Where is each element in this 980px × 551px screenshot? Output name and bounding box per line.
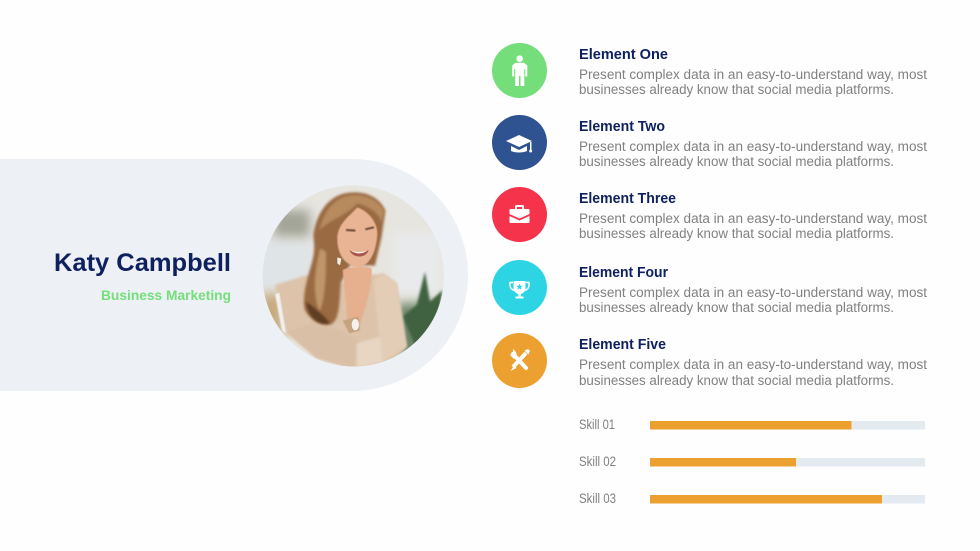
heading: person name: Katy Campbell [54, 249, 231, 277]
chart: skill bars [579, 417, 925, 506]
panel: profile band [0, 159, 468, 391]
photo: smiling woman [257, 183, 447, 370]
skill 02 bar: Skill 02 [579, 454, 616, 469]
text: element four description: Present complex data in an easy-to-understand way, most [579, 285, 927, 300]
skill 03 bar [579, 491, 925, 506]
icon: trophy [492, 260, 547, 315]
element one [492, 43, 927, 98]
heading: element four: Element Four [579, 264, 668, 281]
heading: element three: Element Three [579, 190, 676, 207]
text: element three description: Present complex data in an easy-to-understand way, most [579, 211, 927, 226]
heading: element five: Element Five [579, 336, 666, 353]
text: job title: Business Marketing [101, 287, 231, 303]
skill 03 bar: Skill 03 [579, 491, 616, 506]
text: element three second line: businesses already know that social media platforms. [579, 226, 894, 241]
element two [492, 115, 927, 170]
text: element one second line: businesses already know that social media platforms. [579, 82, 894, 97]
element four [492, 260, 927, 315]
text: element two second line: businesses already know that social media platforms. [579, 154, 894, 169]
element three [492, 187, 927, 242]
skill 01 bar: Skill 01 [579, 417, 615, 432]
text: element two description: Present complex data in an easy-to-understand way, most [579, 139, 927, 154]
text: element five description: Present complex data in an easy-to-understand way, most [579, 357, 927, 372]
icon: briefcase [492, 187, 547, 242]
icon: graduation cap [492, 115, 547, 170]
text: element one description: Present complex data in an easy-to-understand way, most [579, 67, 927, 82]
text: element five second line: businesses already know that social media platforms. [579, 373, 894, 388]
icon: crossed tools [492, 333, 547, 388]
heading: element two: Element Two [579, 118, 665, 135]
skill 01 bar [579, 417, 925, 432]
element five [492, 333, 927, 388]
heading: element one: Element One [579, 46, 668, 63]
icon: person [492, 43, 547, 98]
text: element four second line: businesses already know that social media platforms. [579, 300, 894, 315]
skill 02 bar [579, 454, 925, 469]
